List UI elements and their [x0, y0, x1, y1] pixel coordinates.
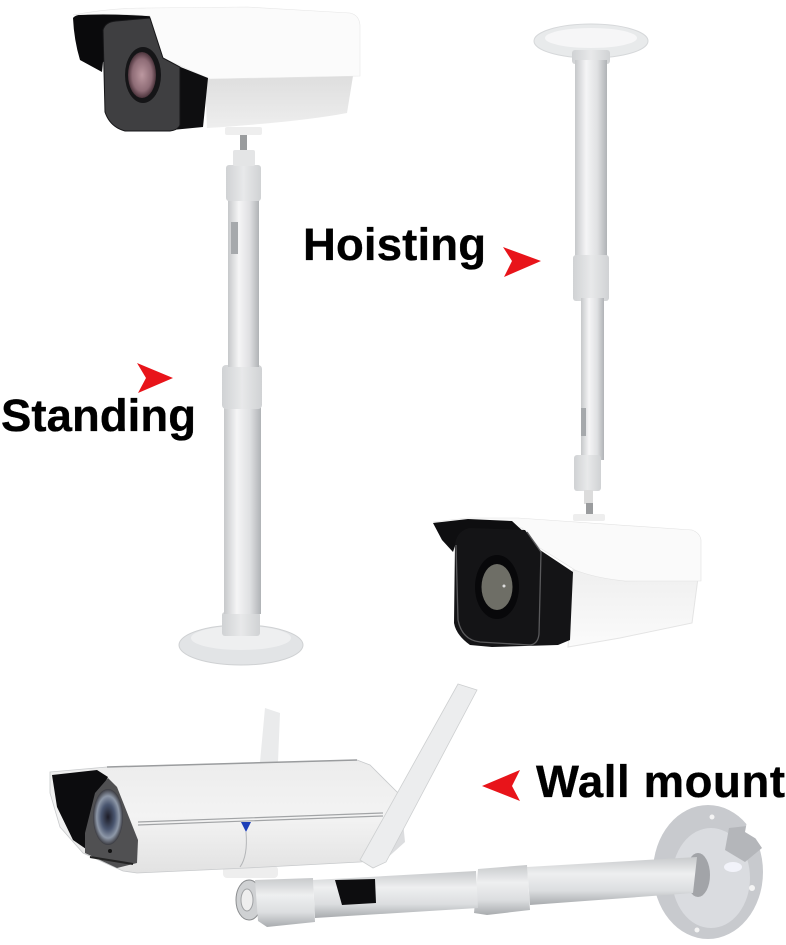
hood [73, 7, 360, 79]
outer collar [474, 865, 530, 915]
camera bracket [223, 866, 278, 878]
blue marker [241, 822, 251, 832]
black front [454, 528, 573, 647]
lower body [568, 570, 698, 647]
body [50, 760, 398, 873]
end collar [255, 878, 315, 927]
black strip [172, 66, 208, 130]
hood [433, 518, 701, 581]
hoisting camera [433, 518, 701, 647]
rear antenna [260, 708, 280, 762]
lens [93, 789, 123, 845]
outer arm [527, 857, 697, 905]
wall camera [50, 684, 477, 873]
antenna hub [385, 815, 405, 860]
arrow: standing [137, 363, 173, 393]
end ball [236, 880, 262, 920]
label: wall mount: Wall mount [536, 756, 785, 807]
standing mount: pole and base [179, 127, 303, 665]
label: standing: Standing [1, 390, 196, 441]
wall mount: arm and plate [223, 805, 772, 939]
black hood [52, 770, 108, 849]
label: hoisting: Hoisting [303, 219, 486, 270]
lower body [205, 76, 353, 128]
standing camera [73, 7, 360, 131]
bezel line [456, 532, 541, 645]
arrow: wall mount [482, 770, 520, 801]
arrow: hoisting [503, 247, 541, 277]
grey front face [103, 18, 180, 131]
lens [125, 47, 161, 103]
slot [335, 879, 376, 905]
hoisting mount: pole and base [534, 24, 648, 521]
seam lines [138, 813, 383, 825]
inner arm [313, 871, 478, 918]
hood shadow [73, 8, 160, 72]
grey face [85, 778, 138, 868]
lens [475, 555, 519, 619]
wall plate [653, 805, 763, 939]
hood shadow [433, 519, 526, 552]
front antenna [360, 684, 477, 868]
arm neck [686, 853, 710, 897]
